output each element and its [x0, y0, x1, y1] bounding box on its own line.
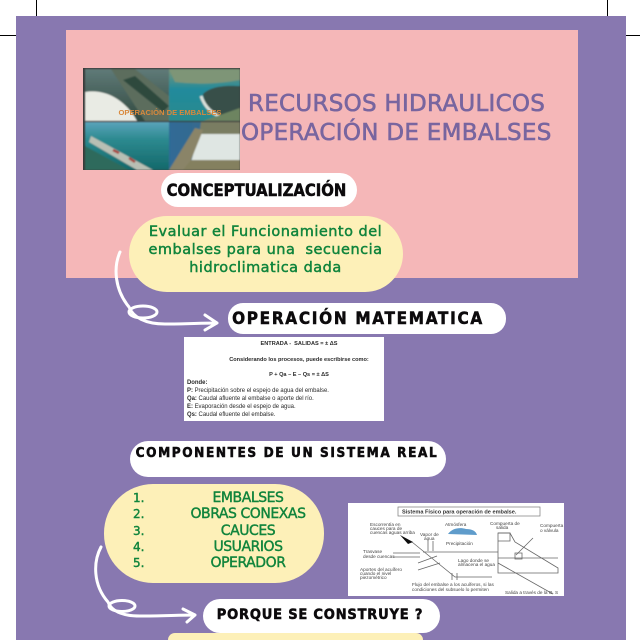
diagram: physical system: Compuerta de — [490, 521, 520, 526]
diagram: physical system: Atmósfera — [445, 522, 467, 527]
diagram: physical system: cuando el nivel — [360, 571, 391, 576]
heading: conceptualización — [161, 173, 357, 207]
diagram: physical system: Trasvase — [363, 549, 382, 554]
diagram: physical system: Precipitación — [446, 541, 473, 546]
heading: porque se construye: PORQUE SE CONSTRUYE ? — [217, 607, 423, 623]
callout: cut off at bottom — [168, 633, 423, 640]
callout: evaluation text: hidroclimatica dada — [189, 260, 342, 276]
callout: evaluation text: Evaluar el Funcionamiento del — [149, 224, 382, 240]
list labels — [190, 490, 306, 571]
title — [241, 91, 552, 146]
arrow loop — [109, 600, 135, 612]
image: collage of dams — [83, 68, 240, 170]
heading: porque se construye — [203, 599, 440, 633]
diagram: physical system: Compuerta — [540, 523, 564, 528]
equation: processes: P + Qa – E – Qs = ± ΔS — [269, 372, 329, 378]
list labels: CAUCES — [221, 523, 275, 539]
list labels: USUARIOS — [213, 539, 283, 555]
arrow: to operación matemática — [114, 250, 218, 332]
heading: operación matemática — [228, 303, 506, 334]
diagram: physical system: cuencas aguas arriba — [370, 530, 415, 535]
diagram: physical system: piezométrico — [360, 575, 387, 580]
heading: componentes: COMPONENTES DE UN SISTEMA REAL — [136, 445, 438, 461]
diagram: physical system: salida — [496, 525, 509, 530]
list numbers: 2. — [133, 507, 144, 521]
image: water balance equations — [184, 337, 384, 421]
equation: balance: ENTRADA - SALIDAS = ± ΔS — [261, 341, 337, 347]
arrow: to porque se construye — [94, 545, 196, 624]
diagram: physical system: almacena el agua — [458, 562, 495, 567]
diagram: physical system: desde cuencas — [363, 554, 395, 559]
diagram: physical system: condiciones del subsuelo lo permiten — [412, 587, 489, 592]
legend: variable definitions: Qa: Caudal afluente al embalse o aporte del río. — [187, 396, 314, 402]
diagram: physical system: Sistema Físico para operación de embalse. — [402, 510, 517, 516]
callout: evaluation text: embalses para una secuencia — [149, 242, 382, 258]
diagram: physical system: Vapor de — [420, 532, 439, 537]
heading: operación matemática: OPERACIÓN MATEMATICA — [232, 309, 484, 329]
heading: conceptualización: CONCEPTUALIZACIÓN — [167, 181, 346, 200]
list labels: OPERADOR — [210, 555, 285, 571]
arrow loop — [129, 306, 157, 318]
panel: pink header — [66, 30, 578, 278]
legend: variable definitions: P: Precipitación sobre el espejo de agua del embalse. — [187, 388, 329, 394]
diagram: physical system: Aportes del acuífero — [360, 567, 402, 572]
list numbers: 1. — [133, 491, 144, 505]
diagram: physical system: Salida a través de la O. S — [505, 590, 558, 595]
legend: variable definitions — [187, 380, 329, 418]
diagram: physical system: Lago donde se — [458, 558, 489, 563]
text: processes: Considerando los procesos, puede escribirse como: — [229, 357, 369, 363]
legend: variable definitions: Qs: Caudal efluente del embalse. — [187, 412, 275, 418]
list numbers — [133, 491, 144, 570]
callout: evaluation text — [129, 216, 403, 292]
list numbers: 4. — [133, 540, 144, 554]
title: OPERACIÓN DE EMBALSES — [241, 120, 552, 146]
image caption: OPERACIÓN DE EMBALSES — [119, 108, 221, 117]
diagram: physical system: cauces para de — [370, 526, 402, 531]
list labels: OBRAS CONEXAS — [190, 506, 306, 522]
title: RECURSOS HIDRAULICOS — [248, 91, 545, 117]
diagram: physical system: agua — [424, 536, 435, 541]
legend: variable definitions: Donde: — [187, 380, 207, 386]
diagram: physical system: o válvula — [540, 528, 559, 533]
diagram: physical system — [348, 503, 564, 596]
heading: componentes — [130, 441, 446, 477]
diagram: physical system: Escorrentía en — [370, 522, 401, 527]
list: components — [104, 484, 324, 583]
list numbers: 3. — [133, 524, 144, 538]
legend: variable definitions: E: Evaporación desde el espejo de agua. — [187, 404, 296, 410]
list labels: EMBALSES — [213, 490, 283, 506]
diagram: physical system: Flujo del embalse a los acuíferos, si las — [412, 582, 494, 587]
list numbers: 5. — [133, 556, 144, 570]
